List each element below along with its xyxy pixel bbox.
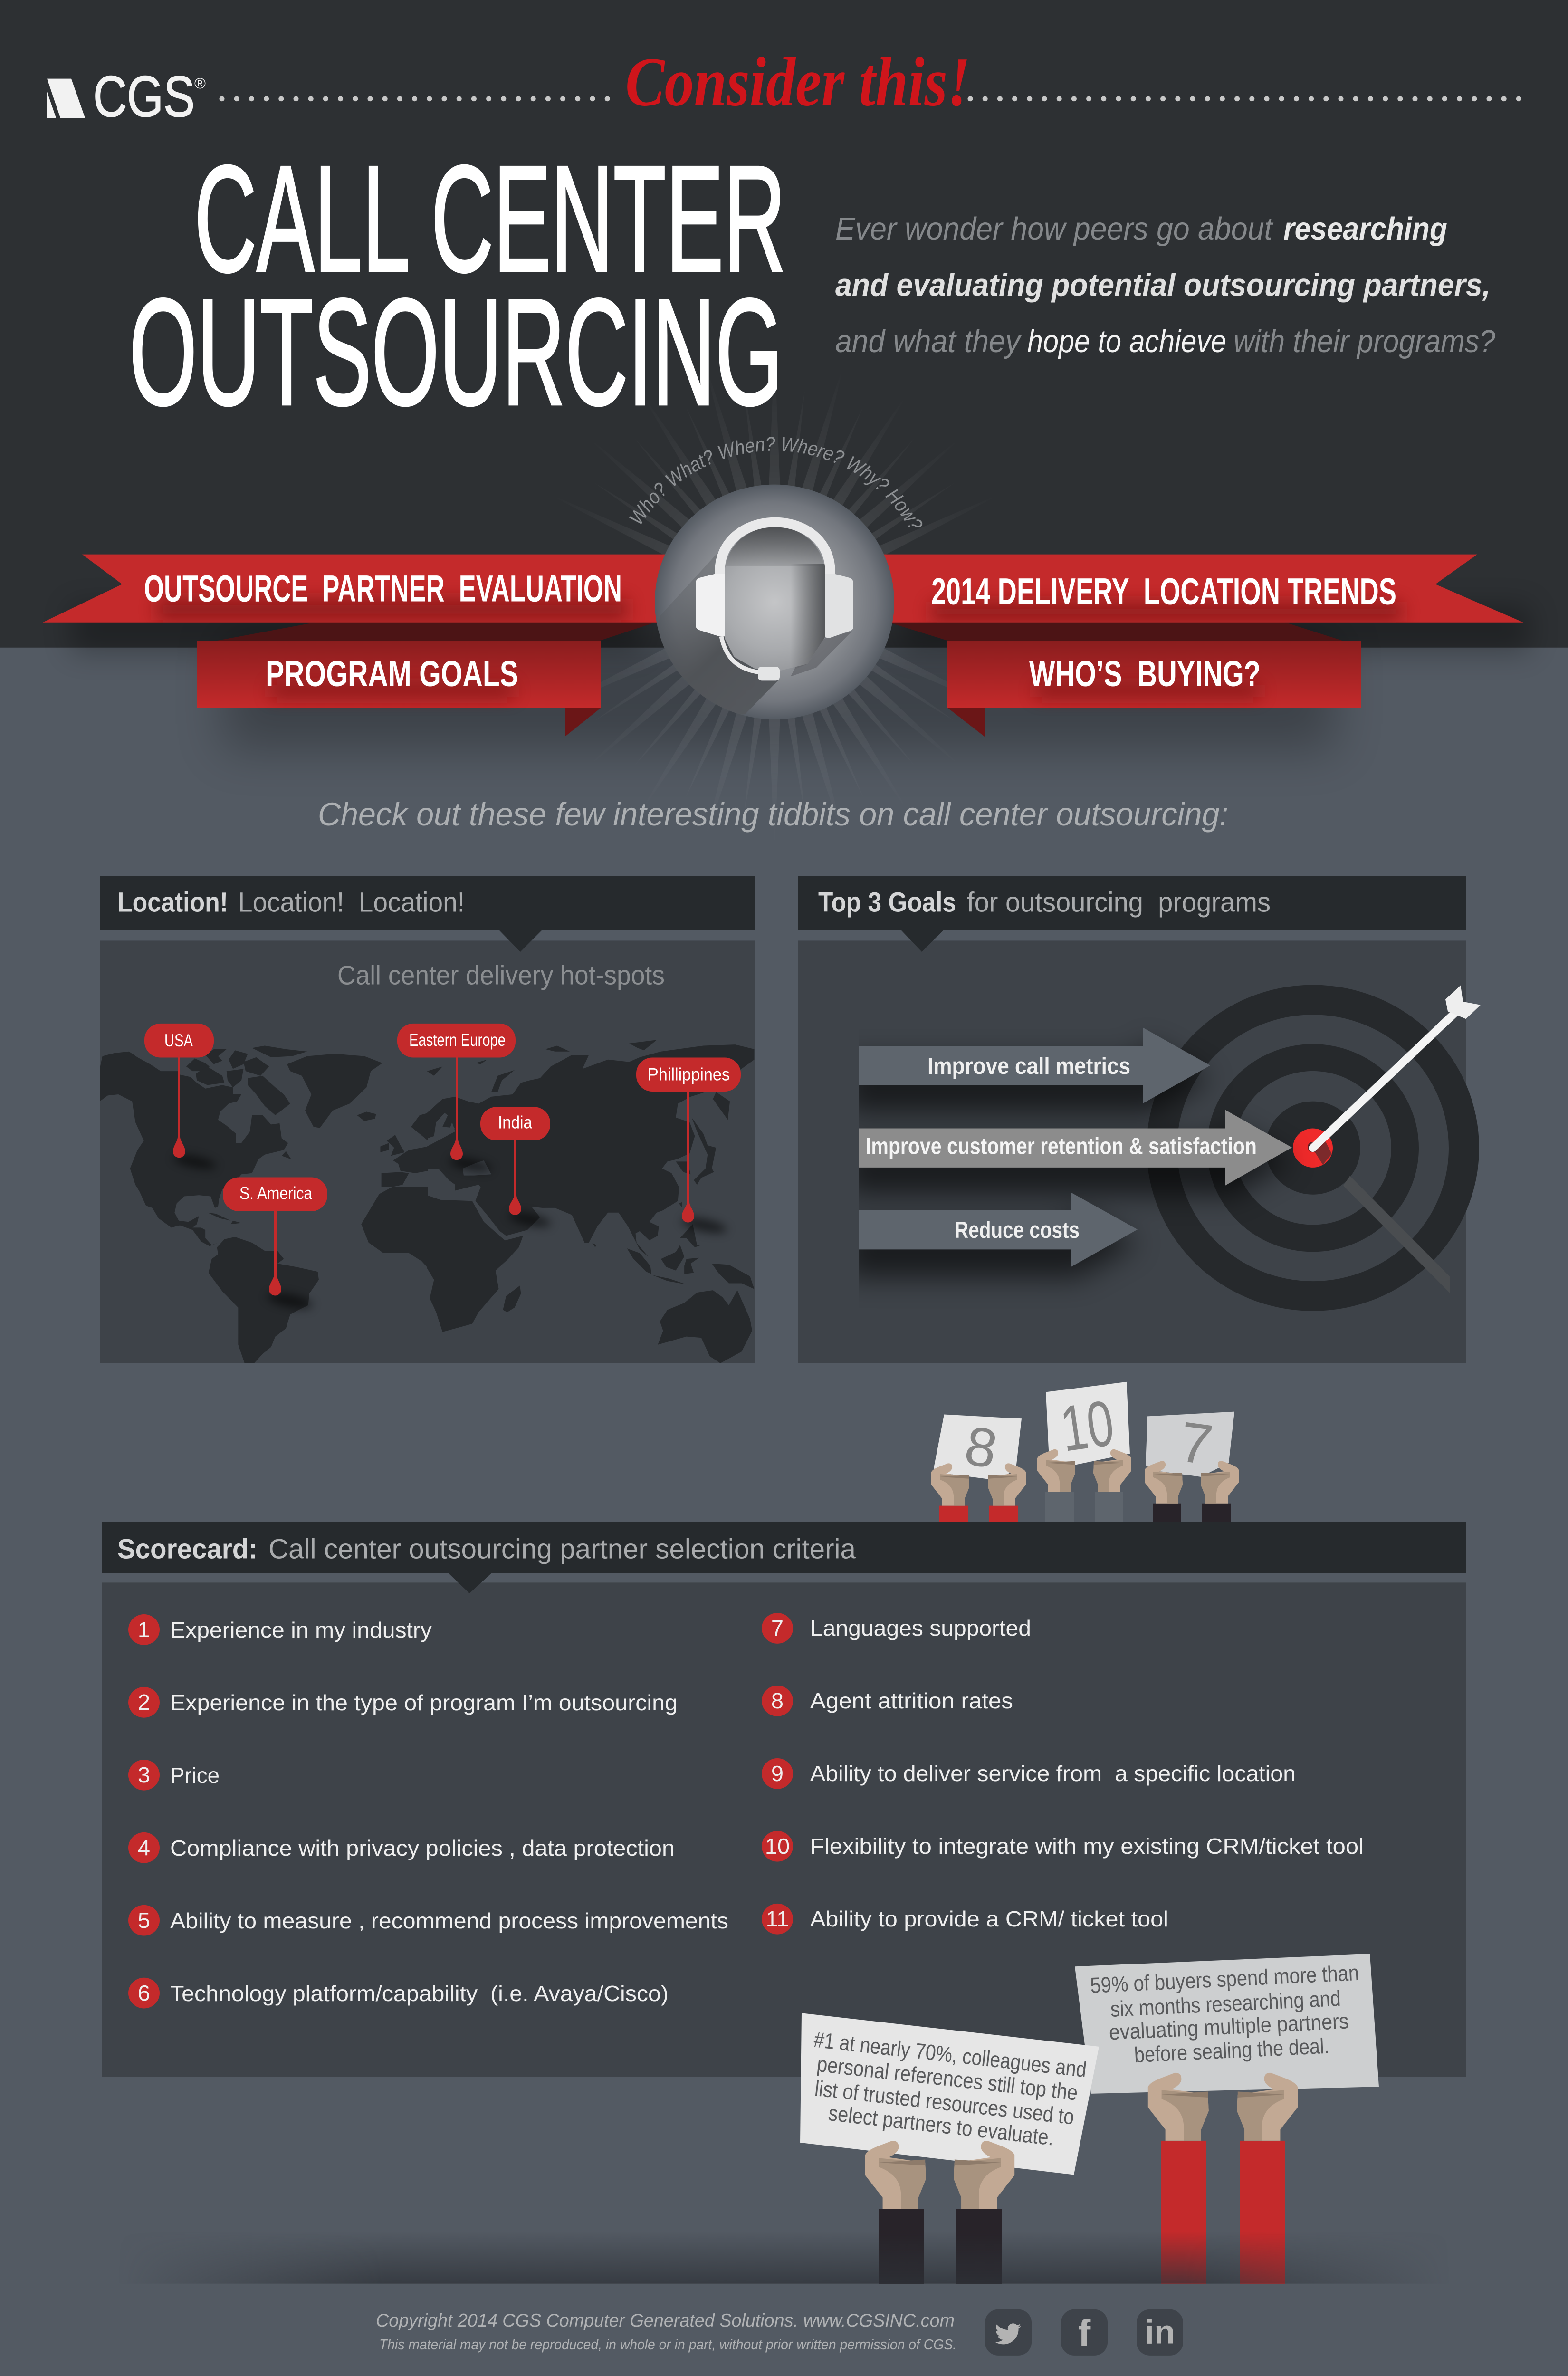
criteria right column: 10 [765, 1834, 790, 1859]
CGS logo: CGS [93, 65, 195, 129]
criteria left column: 4 [138, 1835, 150, 1860]
script heading: Consider this: Consider this! [625, 44, 970, 121]
main title [129, 134, 786, 437]
card: 7: 7 [1176, 1410, 1216, 1477]
hands [931, 1449, 1239, 1506]
criteria left column: Compliance with privacy policies , data protection [170, 1836, 675, 1860]
pin: Eastern Europe [397, 1024, 516, 1175]
sign: 59 percent of buyers: before sealing the deal. [1134, 2033, 1330, 2067]
dotted rule left [222, 96, 608, 101]
left ear cup [696, 574, 725, 636]
header bar: goals: Top 3 Goals [818, 886, 956, 918]
sign: number one at nearly 70 percent: list of trusted resources used to [813, 2076, 1076, 2129]
criteria right column: 8 [771, 1689, 784, 1713]
intro paragraph: with their programs? [1233, 324, 1495, 359]
sign: number one at nearly 70 percent: select partners to evaluate. [827, 2100, 1055, 2150]
intro paragraph: and what they [835, 324, 1022, 359]
sign: number one at nearly 70 percent [800, 2013, 1099, 2175]
main title: OUTSOURCING [129, 268, 783, 437]
arrow: improve call metrics: Improve call metrics [927, 1053, 1130, 1079]
sign: 59 percent of buyers [1075, 1954, 1379, 2094]
dotted rule right [970, 96, 1529, 101]
pin: India: India [498, 1112, 532, 1132]
sign: number one at nearly 70 percent: personal references still top the [816, 2051, 1079, 2105]
floor shadow [119, 2232, 1449, 2284]
pin: USA: USA [164, 1030, 193, 1050]
footer copyright [376, 2310, 956, 2353]
icon: linkedin: in [1145, 2313, 1175, 2351]
header bar: location [100, 876, 755, 952]
tagline: Check out these few interesting tidbits on call center outsourcing: [318, 796, 1228, 833]
right ear cup [825, 574, 853, 638]
pin: Eastern Europe: Eastern Europe [409, 1030, 506, 1050]
ribbon: outsource partner evaluation: OUTSOURCE PARTNER EVALUATION [144, 567, 622, 610]
arrow: improve customer retention: Improve customer retention & satisfaction [866, 1133, 1257, 1159]
header bar: goals [798, 876, 1466, 952]
sunburst rays [611, 425, 938, 767]
criteria left column: Technology platform/capability (i.e. Avaya/Cisco) [170, 1981, 669, 2006]
head fill [725, 527, 825, 671]
sign: 59 percent of buyers: six months researching and [1110, 1986, 1341, 2022]
card: 8 [934, 1414, 1022, 1480]
icon: facebook: f [1078, 2312, 1091, 2354]
long shadow of headset [651, 549, 852, 720]
criteria left column: 3 [138, 1763, 150, 1787]
icon: twitter [985, 2309, 1032, 2356]
criteria right column: Languages supported [810, 1616, 1031, 1640]
icon: linkedin [1137, 2309, 1183, 2356]
panel: scorecard [102, 1522, 1466, 2077]
arrow shadows [846, 1042, 1292, 1281]
microphone [758, 667, 780, 680]
criteria left column: 2 [138, 1690, 150, 1715]
header bar: scorecard [102, 1522, 1466, 1593]
sign: 59 percent of buyers: 59% of buyers spend more than [1090, 1960, 1359, 1998]
criteria right column: 7 [771, 1616, 784, 1640]
sign: 59 percent of buyers: evaluating multiple partners [1109, 2009, 1349, 2044]
ribbon: 2014 delivery location trends [884, 555, 1523, 641]
icon: facebook [1061, 2309, 1108, 2356]
pin: S. America: S. America [239, 1183, 312, 1203]
criteria left column: 6 [138, 1981, 150, 2005]
pin: India [480, 1107, 552, 1229]
headset medallion [651, 485, 894, 720]
header bar: scorecard: Call center outsourcing partner selection criteria [268, 1533, 856, 1564]
target [1147, 985, 1479, 1311]
map: Americas and Atlantic [100, 1046, 428, 1363]
criteria left column: Ability to measure , recommend process improvements [170, 1908, 728, 1933]
header bar: scorecard: Scorecard: [117, 1533, 258, 1564]
header bar: location: Location! [117, 886, 228, 918]
CGS logo [47, 65, 206, 129]
intro paragraph: and evaluating potential outsourcing partners, [835, 268, 1491, 303]
sign: number one at nearly 70 percent: #1 at nearly 70%, colleagues and [813, 2027, 1088, 2082]
footer copyright: Copyright 2014 CGS Computer Generated Solutions. www.CGSINC.com [376, 2310, 955, 2331]
question words on arc: Who? What? When? Where? Why? How? [624, 433, 927, 535]
footer copyright: This material may not be reproduced, in whole or in part, without prior written permission of CGS. [379, 2336, 956, 2353]
pin: Phillippines: Phillippines [648, 1064, 730, 1084]
ribbon: program goals: PROGRAM GOALS [266, 654, 518, 694]
pin: S. America [223, 1177, 327, 1312]
criteria right column: Agent attrition rates [810, 1689, 1013, 1713]
criteria right column [762, 1613, 1364, 1935]
red sleeved arms [1148, 2073, 1298, 2284]
header bar: goals: for outsourcing programs [967, 886, 1271, 918]
score cards and hands [931, 1382, 1239, 1523]
criteria right column: Ability to deliver service from a specific location [810, 1761, 1296, 1786]
ribbon: who's buying: WHO’S BUYING? [1029, 654, 1261, 694]
pin: USA [144, 1024, 217, 1172]
arrow: reduce costs [859, 1192, 1138, 1267]
dark sleeved arms [865, 2141, 1014, 2284]
criteria left column: Price [170, 1763, 220, 1788]
criteria right column: Ability to provide a CRM/ ticket tool [810, 1907, 1168, 1931]
panel: top 3 goals [798, 876, 1481, 1363]
sleeves [939, 1492, 1231, 1523]
card: 8: 8 [960, 1414, 1002, 1480]
criteria right column: 11 [766, 1907, 789, 1931]
ribbon cast shadow [71, 606, 1530, 750]
main title: CALL CENTER [194, 134, 786, 304]
card: 10: 10 [1056, 1387, 1118, 1465]
header bar: location: Location! Location! [238, 886, 465, 918]
panel: location map [100, 876, 755, 1363]
intro paragraph: Ever wonder how peers go about [835, 211, 1274, 247]
intro paragraph: hope to achieve [1027, 324, 1226, 359]
card: 7 [1146, 1410, 1234, 1477]
criteria left column: 1 [138, 1618, 150, 1642]
question words on arc [624, 433, 929, 602]
ribbon: who's buying [947, 641, 1361, 737]
ribbon: outsource partner evaluation [43, 555, 665, 641]
map subtitle: Call center delivery hot-spots [337, 960, 665, 990]
dart [1313, 986, 1481, 1148]
headband [720, 522, 830, 580]
arrow: improve customer retention [859, 1110, 1292, 1186]
world map [100, 1040, 754, 1363]
arrow: reduce costs: Reduce costs [955, 1217, 1080, 1243]
criteria left column [128, 1614, 728, 2008]
pin: Phillippines [636, 1057, 741, 1236]
criteria left column: Experience in my industry [170, 1618, 432, 1642]
map: Europe Asia Africa Oceania [427, 1040, 754, 1363]
criteria left column: 5 [138, 1908, 150, 1933]
criteria right column: Flexibility to integrate with my existing CRM/ticket tool [810, 1834, 1364, 1859]
criteria left column: Experience in the type of program I’m outsourcing [170, 1690, 678, 1715]
criteria right column: 9 [771, 1761, 784, 1786]
intro paragraph: researching [1283, 211, 1447, 247]
CGS logo: ® [194, 75, 206, 92]
header background [0, 0, 1568, 648]
microphone boom [721, 636, 759, 672]
ribbon: program goals [197, 641, 601, 737]
arrow: improve call metrics [859, 1028, 1210, 1103]
intro paragraph [835, 211, 1495, 359]
